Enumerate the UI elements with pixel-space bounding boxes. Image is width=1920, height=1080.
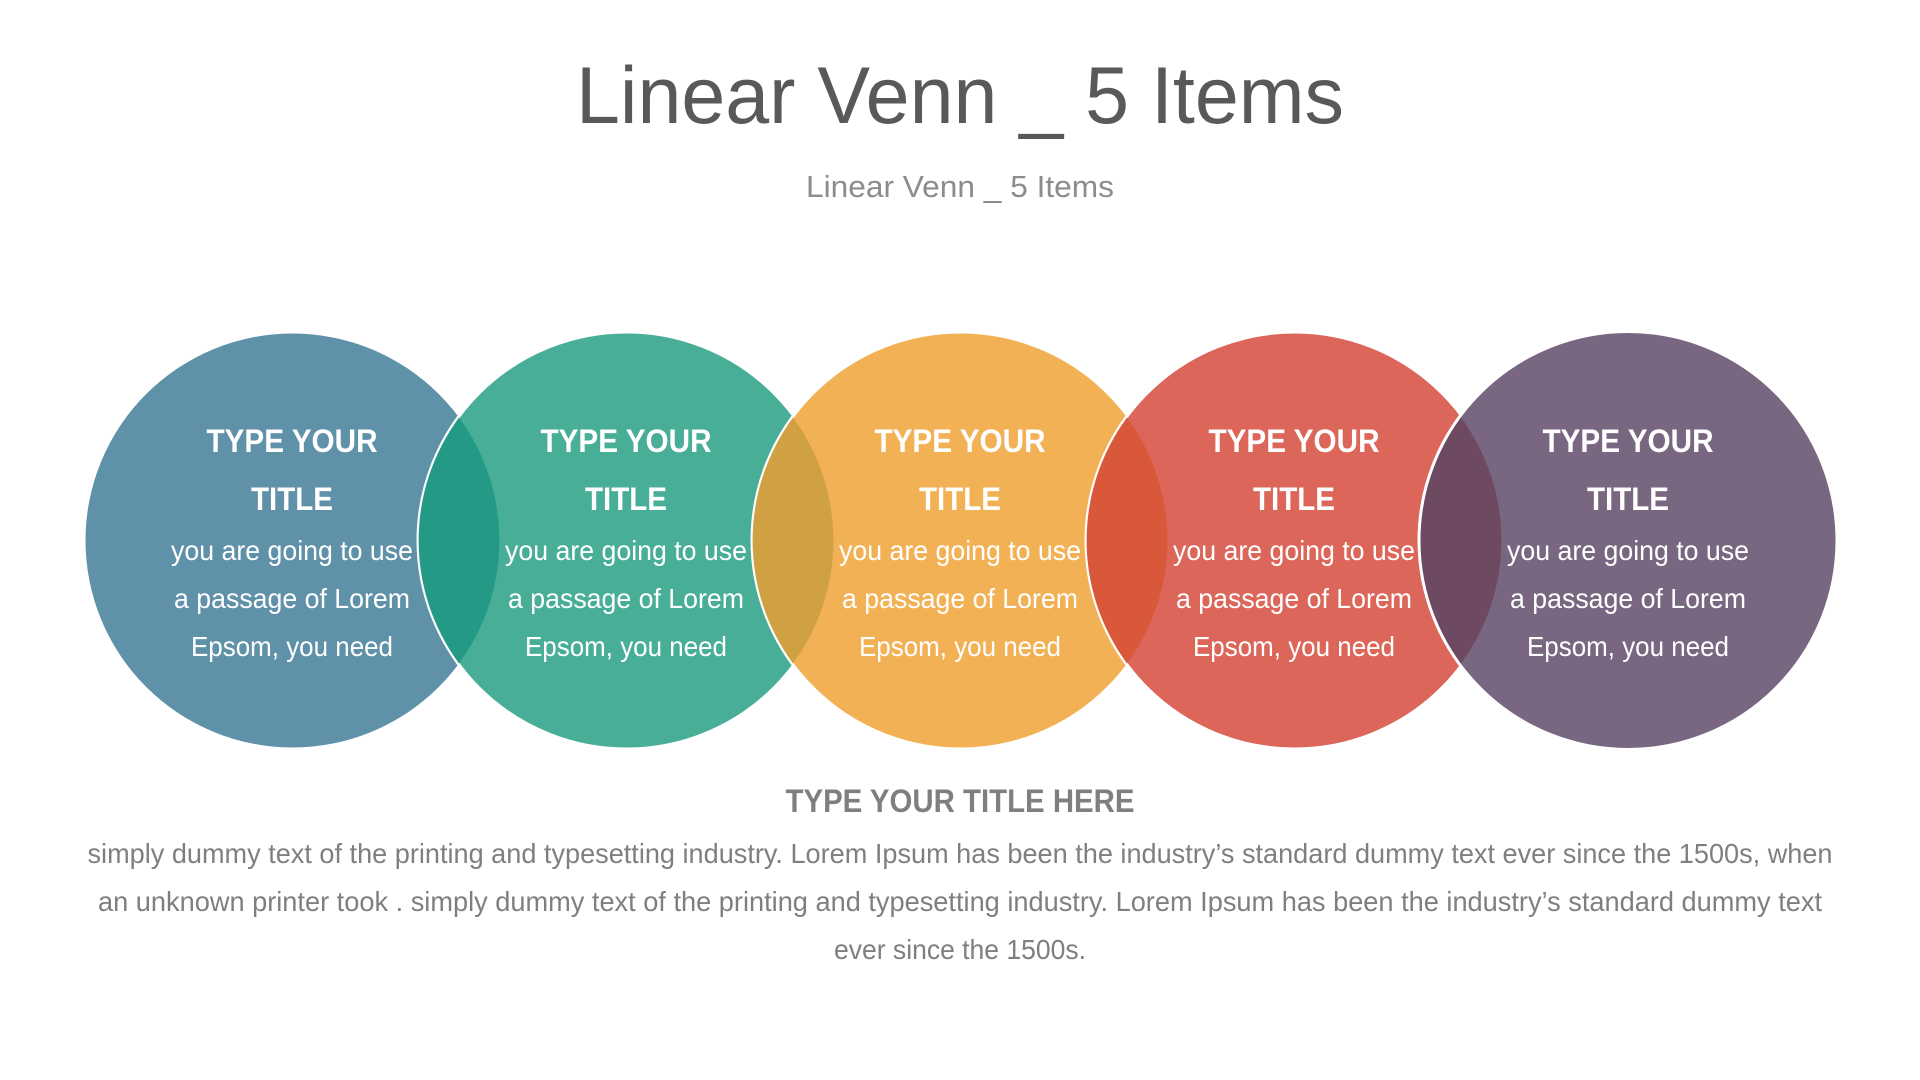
circle 2: green: TITLE <box>585 481 667 517</box>
circle 3: orange: TYPE YOUR <box>874 423 1046 459</box>
circle 5: purple <box>1419 332 1837 750</box>
circle 4: red: TITLE <box>1253 481 1335 517</box>
circle 1: blue: Epsom, you need <box>191 631 393 662</box>
bottom heading: TYPE YOUR TITLE HERE <box>786 783 1134 819</box>
circle 1: blue: TITLE <box>251 481 333 517</box>
circle 4: red: a passage of Lorem <box>1176 583 1412 614</box>
circle 2: green: TYPE YOUR <box>540 423 712 459</box>
bottom paragraph: simply dummy text of the printing and typesetting industry. Lorem Ipsum has been the industry’s standard dummy text ever since the 1500s, when <box>88 838 1832 869</box>
circle 1: blue <box>86 334 500 748</box>
circle 2: green: a passage of Lorem <box>508 583 744 614</box>
circle 5: purple: you are going to use <box>1507 535 1749 566</box>
title: Linear Venn _ 5 Items <box>576 51 1344 141</box>
bottom paragraph: ever since the 1500s. <box>834 934 1086 965</box>
circle 2: green: Epsom, you need <box>525 631 727 662</box>
circle 4: red: Epsom, you need <box>1193 631 1395 662</box>
circle 2: green <box>418 332 835 749</box>
circle 3: orange: you are going to use <box>839 535 1081 566</box>
circle 5: purple: Epsom, you need <box>1527 631 1729 662</box>
circle 5: purple: TITLE <box>1587 481 1669 517</box>
circle 5: purple: TYPE YOUR <box>1542 423 1714 459</box>
bottom paragraph: an unknown printer took . simply dummy text of the printing and typesetting industry. Lorem Ipsum has been the industry’s standard dummy text <box>98 886 1822 917</box>
circle 4: red: TYPE YOUR <box>1208 423 1380 459</box>
circle 3: orange <box>752 332 1169 749</box>
circle 1: blue: you are going to use <box>171 535 413 566</box>
circle 3: orange: TITLE <box>919 481 1001 517</box>
circle 5: purple: a passage of Lorem <box>1510 583 1746 614</box>
circle 2: green: you are going to use <box>505 535 747 566</box>
circle 4: red <box>1086 332 1503 749</box>
circle 1: blue: a passage of Lorem <box>174 583 410 614</box>
bottom paragraph <box>88 838 1832 965</box>
circle 4: red: you are going to use <box>1173 535 1415 566</box>
circle 1: blue: TYPE YOUR <box>206 423 378 459</box>
venn diagram <box>86 332 1837 750</box>
circle 3: orange: a passage of Lorem <box>842 583 1078 614</box>
subtitle: Linear Venn _ 5 Items <box>806 169 1114 204</box>
circle 3: orange: Epsom, you need <box>859 631 1061 662</box>
